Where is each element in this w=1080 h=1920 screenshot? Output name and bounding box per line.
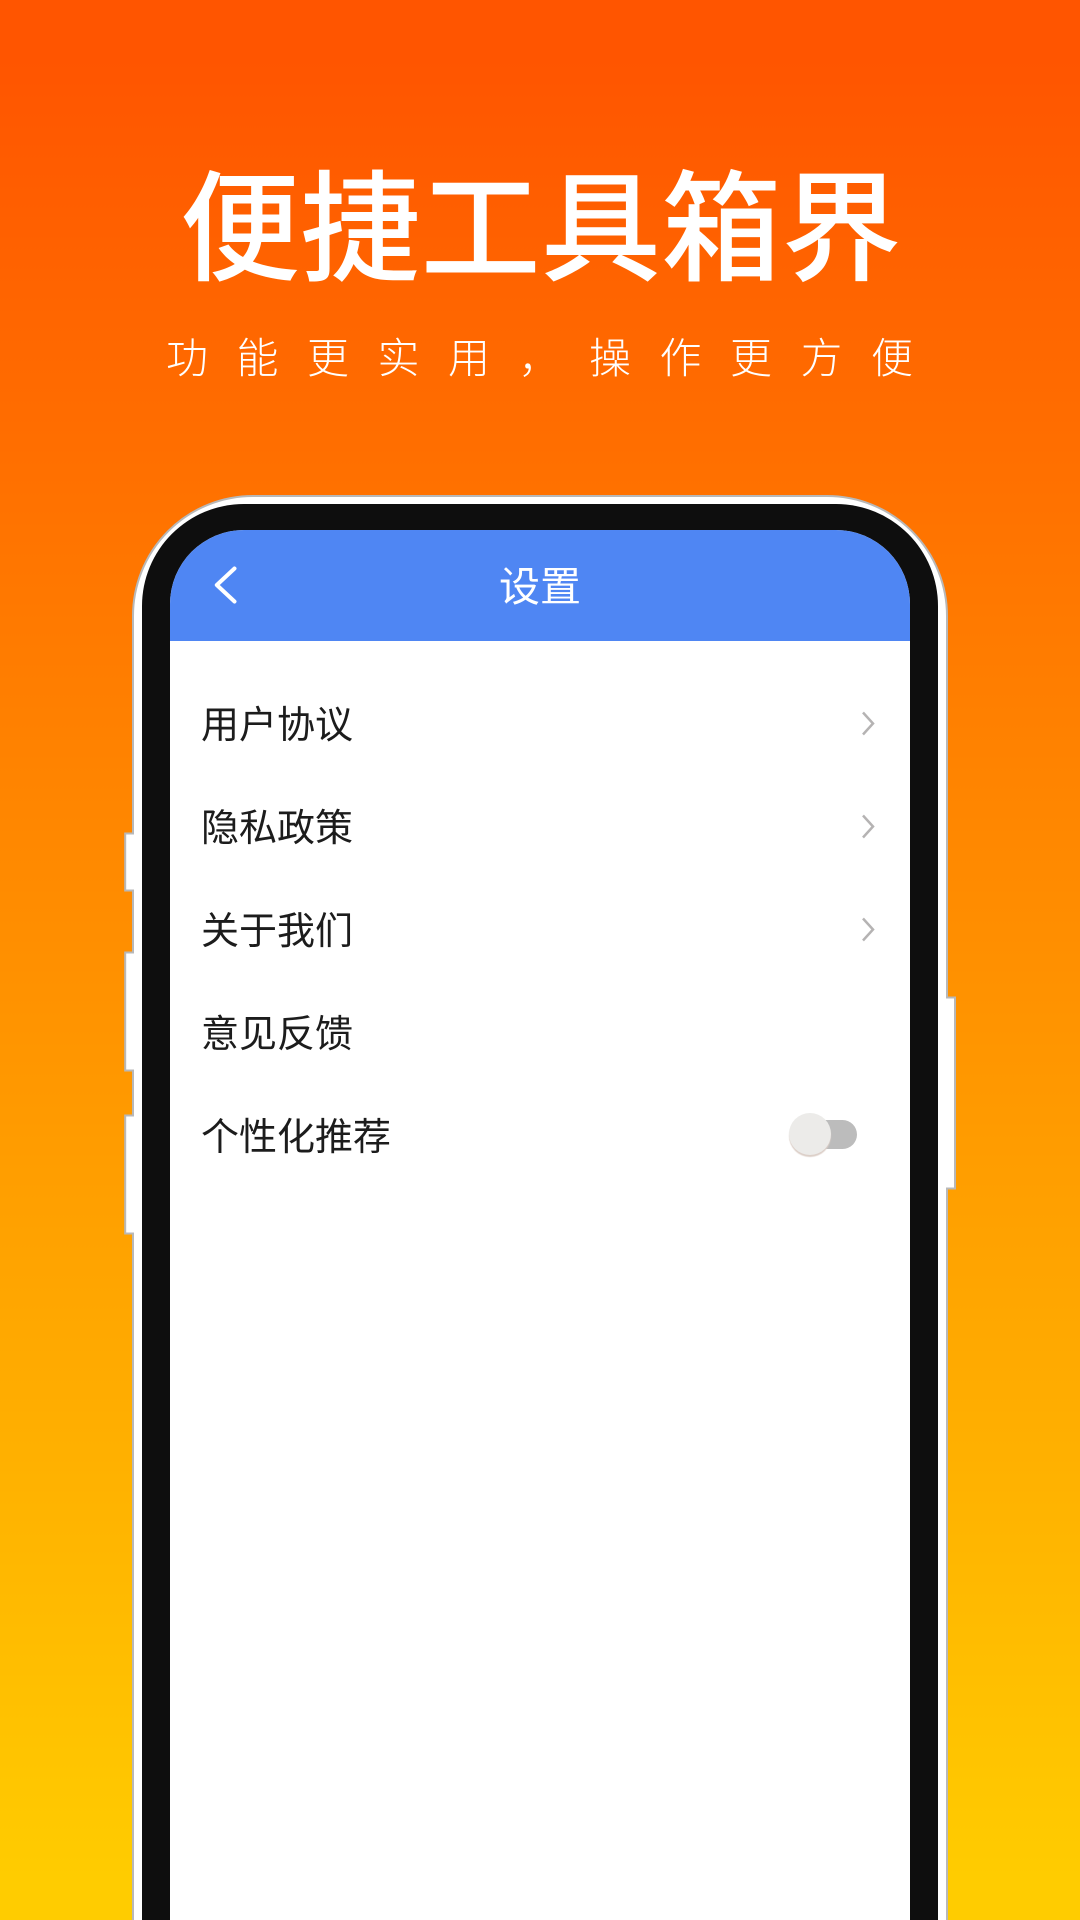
toggle switch	[788, 1113, 857, 1158]
phone black bezel	[142, 504, 938, 1920]
toggle knob	[789, 1113, 831, 1155]
icon: back arrow	[214, 566, 237, 604]
menu row: about us: 关于我们	[201, 911, 353, 953]
title: 便捷工具箱界	[180, 163, 902, 297]
menu row: feedback: 意见反馈	[201, 1014, 353, 1056]
phone outer shell with side buttons	[124, 495, 956, 1920]
header title: 设置	[499, 564, 581, 610]
menu row: privacy policy: 隐私政策	[201, 808, 353, 850]
icon: chevron	[862, 814, 874, 838]
menu row: personalised recommendations: 个性化推荐	[201, 1117, 391, 1159]
subtitle: 功能更实用，操作更方便	[166, 335, 942, 382]
app header bar	[170, 530, 910, 641]
icon: chevron	[862, 712, 874, 736]
icon: chevron	[862, 918, 874, 942]
toggle track	[806, 1120, 857, 1149]
screen	[170, 530, 910, 1920]
menu row: user agreement: 用户协议	[201, 705, 353, 747]
phone mockup	[124, 495, 956, 1920]
